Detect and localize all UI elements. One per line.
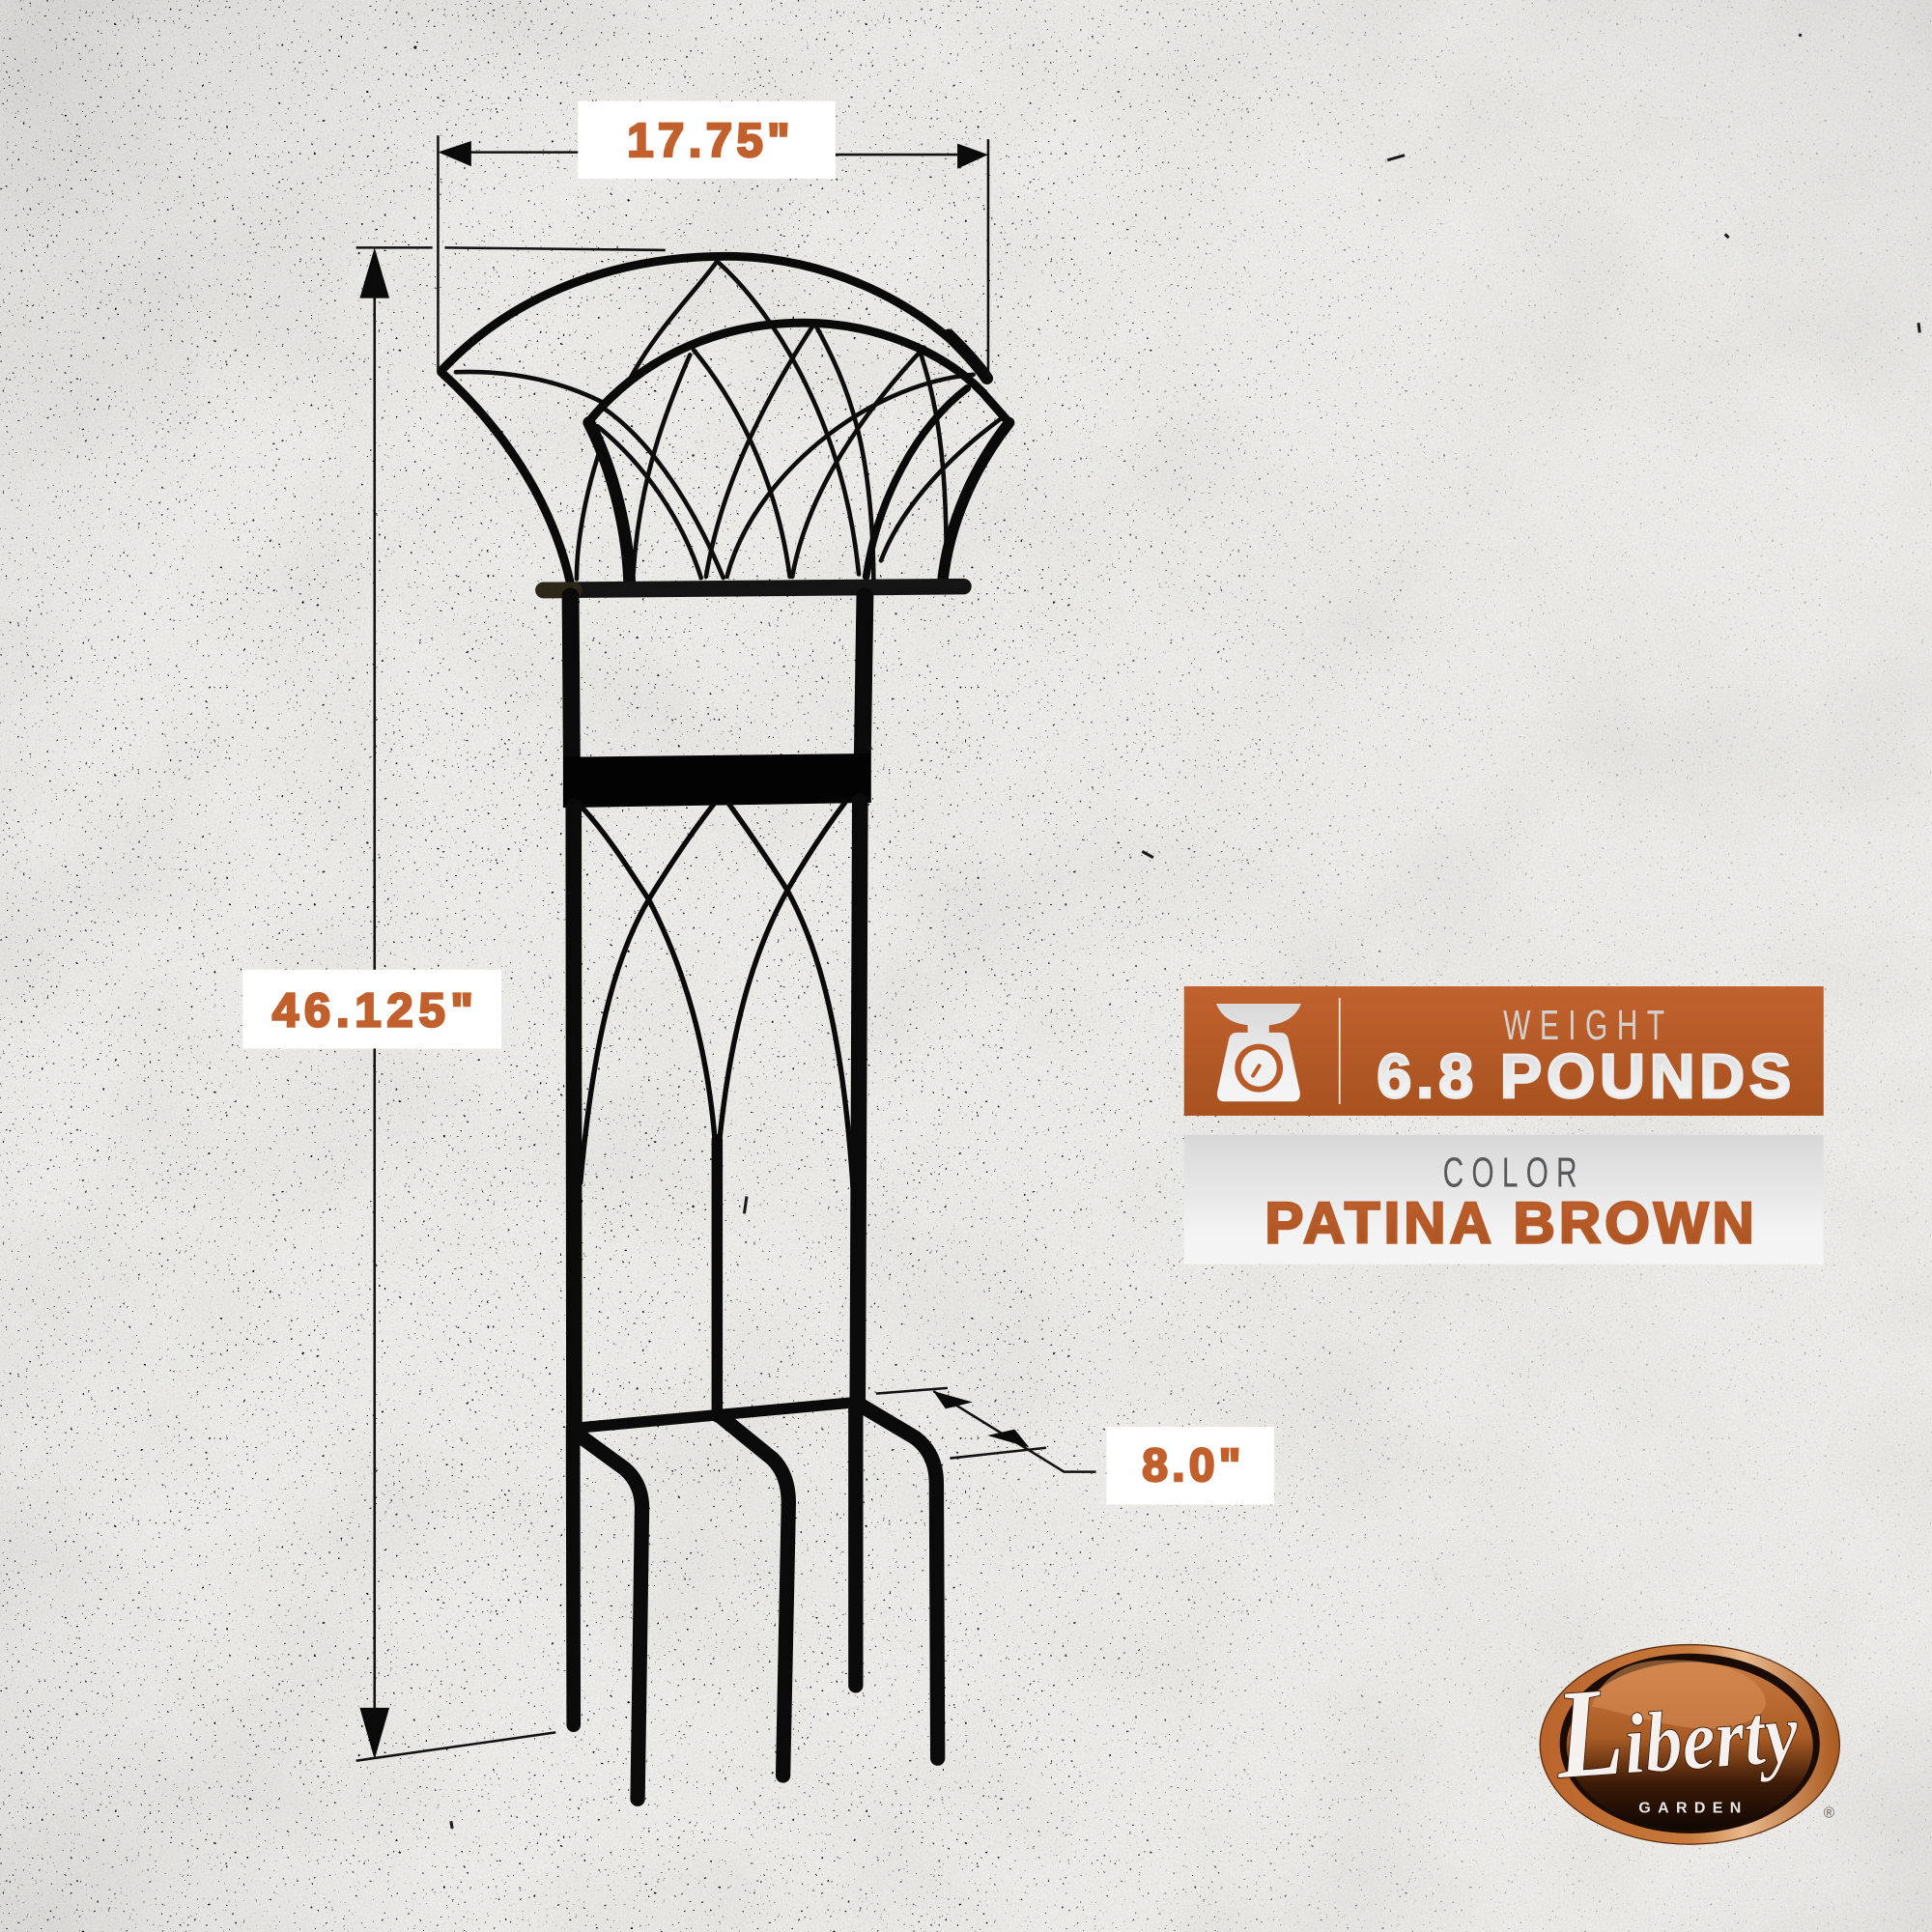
panel: color	[1184, 1135, 1824, 1264]
label: width: 17.75"	[627, 115, 790, 167]
logo: Liberty Garden: ®	[1824, 1804, 1835, 1821]
panel: weight	[1184, 986, 1824, 1116]
lower lattice panel	[574, 801, 860, 1430]
dimension: depth arrow	[876, 1388, 1096, 1472]
label: width	[578, 101, 836, 179]
bottom crossbar and ground stakes	[573, 1403, 938, 1799]
logo: Liberty Garden	[1540, 1645, 1839, 1844]
icon: kitchen scale	[1216, 1004, 1301, 1101]
dimension: height arrow	[356, 247, 666, 1761]
dimension: width arrow	[438, 135, 988, 377]
product: metal garden trellis	[441, 256, 1009, 1799]
panel: weight: 6.8 POUNDS	[1377, 1041, 1791, 1111]
panel: color: COLOR	[1443, 1149, 1577, 1196]
label: depth: 8.0"	[1142, 1440, 1240, 1492]
trellis crown: fan-shaped top with lattice	[441, 256, 1009, 586]
base plate of the crown	[543, 586, 963, 590]
panel: color: PATINA BROWN	[1264, 1191, 1754, 1256]
label: depth	[1106, 1427, 1274, 1504]
logo: Liberty Garden: Liberty	[1549, 1647, 1802, 1806]
panel: weight: WEIGHT	[1503, 1001, 1664, 1048]
upper side posts and crossbar	[563, 596, 871, 808]
label: height	[242, 970, 501, 1048]
label: height: 46.125"	[272, 984, 473, 1037]
logo: Liberty Garden: GARDEN	[1638, 1800, 1741, 1816]
